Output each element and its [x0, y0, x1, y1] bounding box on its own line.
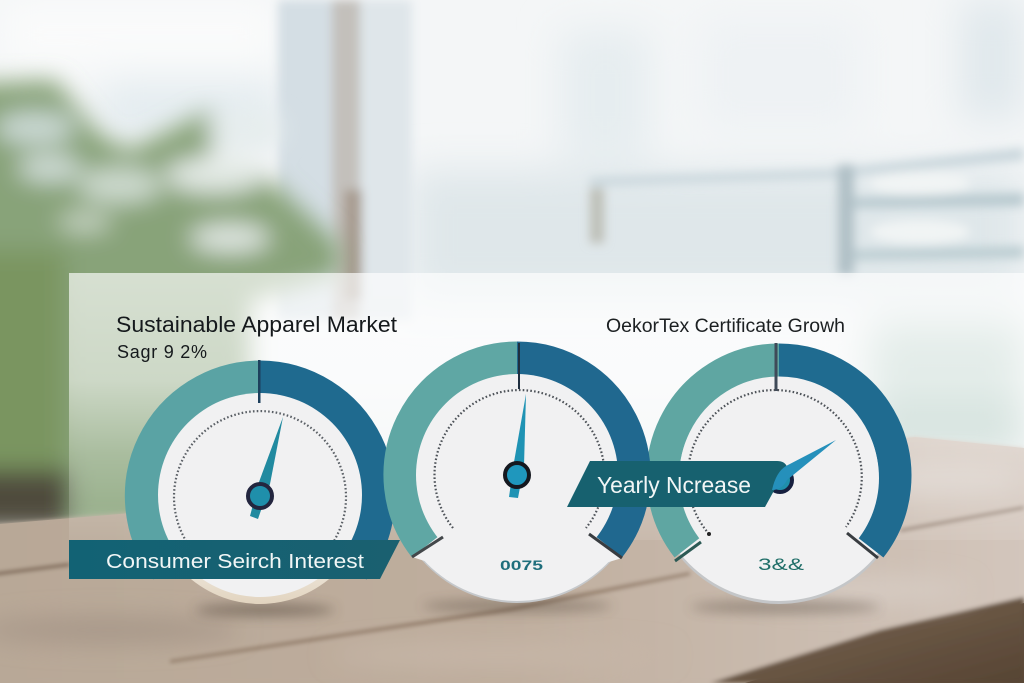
value label: 3&& [758, 555, 805, 574]
banner: Consumer Search Interest [69, 540, 400, 579]
balcony railing [590, 148, 1024, 275]
blurred plant [0, 80, 340, 530]
gauge 3 needle [772, 440, 836, 490]
hub [505, 463, 529, 487]
needle [509, 394, 526, 498]
hub [768, 468, 792, 492]
value label: 0075 [500, 557, 543, 573]
hub [248, 484, 272, 508]
banner: Yearly Increase [567, 461, 787, 507]
translucent panel [69, 273, 1024, 540]
tick marks [675, 542, 701, 561]
banner: Yearly Increase: Yearly Ncrease [597, 472, 751, 498]
subheading: CAGR figure: Sagr 9 2% [117, 342, 207, 362]
wooden table [0, 437, 1024, 683]
window pillar [278, 0, 412, 320]
gauge 2: centre [390, 343, 644, 612]
needle [250, 417, 283, 519]
banner: Consumer Search Interest: Consumer Seirch Interest [106, 551, 364, 573]
tick marks [412, 537, 443, 557]
gauge 1: consumer search interest [142, 360, 378, 616]
gauge 3: certificate growth [651, 343, 907, 613]
heading: certificate growth: OekorTex Certificate Growh [606, 316, 845, 337]
heading: Sustainable Apparel Market: Sustainable Apparel Market [116, 312, 397, 337]
